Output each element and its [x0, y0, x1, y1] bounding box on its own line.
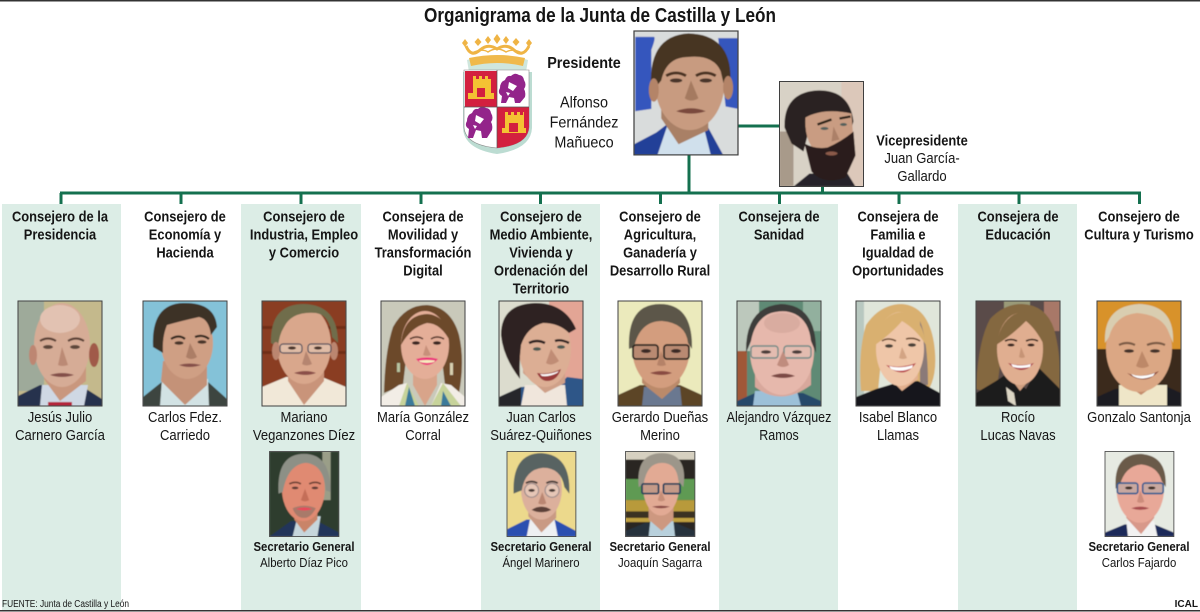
portrait: Jesús Julio Carnero García: [18, 301, 102, 406]
heading: Medio Ambiente,: [490, 227, 592, 243]
president name: Fernández: [550, 114, 618, 132]
heading: Movilidad y: [388, 227, 458, 243]
column: Consejero de Medio Ambiente, Vivienda y Ordenación del Territorio: [490, 209, 592, 570]
name: Jesús Julio: [28, 409, 93, 425]
column: Consejera de Movilidad y Transformación Digital: [375, 209, 471, 443]
portrait: Alejandro Vázquez Ramos: [737, 301, 821, 406]
secretary name: Joaquín Sagarra: [618, 555, 702, 570]
secretary name: Carlos Fajardo: [1102, 555, 1176, 570]
column: Consejero de Economía y Hacienda: [143, 209, 227, 443]
heading: Hacienda: [156, 245, 214, 261]
secretary role: Secretario General: [490, 539, 592, 554]
column: Consejero de la Presidencia: [12, 209, 108, 443]
heading: Oportunidades: [852, 263, 944, 279]
secretary role: Secretario General: [253, 539, 355, 554]
name: Suárez-Quiñones: [490, 427, 592, 443]
name: Gonzalo Santonja: [1087, 409, 1191, 425]
heading: Transformación: [375, 245, 471, 261]
column: Consejero de Agricultura, Ganadería y Desarrollo Rural: [609, 209, 711, 570]
portrait: Carlos Fdez. Carriedo: [143, 301, 227, 406]
name: Rocío: [1001, 409, 1035, 425]
title: Organigrama de la Junta de Castilla y León: [424, 5, 776, 27]
heading: Consejero de: [1098, 209, 1180, 225]
heading: Digital: [403, 263, 443, 279]
name: Ramos: [759, 427, 799, 443]
president name: Mañueco: [554, 134, 614, 152]
president role: Presidente: [547, 54, 621, 72]
column: Consejero de Cultura y Turismo: [1084, 209, 1194, 570]
panel: Educación background: [958, 204, 1077, 610]
secretary role: Secretario General: [1088, 539, 1190, 554]
portrait: Juan Carlos Suárez-Quiñones: [499, 301, 583, 406]
heading: Consejera de: [738, 209, 820, 225]
president name: Alfonso: [560, 94, 608, 112]
portrait: María González Corral: [381, 301, 465, 406]
icon: coat of arms of Castilla y León: [462, 34, 532, 154]
name: Veganzones Díez: [253, 427, 355, 443]
portrait: Alfonso Fernández Mañueco: [634, 31, 738, 155]
name: Mariano: [280, 409, 328, 425]
name: Lucas Navas: [980, 427, 1056, 443]
heading: Territorio: [513, 281, 569, 297]
credit: ICAL: ICAL: [1175, 599, 1198, 610]
heading: Vivienda y: [509, 245, 573, 261]
heading: Ganadería y: [623, 245, 697, 261]
heading: Consejero de: [619, 209, 701, 225]
source note: FUENTE: Junta de Castilla y León: [2, 599, 129, 610]
secretary name: Alberto Díaz Pico: [260, 555, 348, 570]
panel: Medio Ambiente background: [481, 204, 600, 610]
heading: Consejera de: [857, 209, 939, 225]
vice-president block: [780, 82, 968, 186]
portrait: Mariano Veganzones Díez: [262, 301, 346, 406]
portrait: Rocío Lucas Navas: [976, 301, 1060, 406]
panel: Industria background: [241, 204, 361, 610]
heading: Agricultura,: [624, 227, 696, 243]
name: Llamas: [877, 427, 919, 443]
heading: Economía y: [149, 227, 222, 243]
vice-president name: Juan García-: [884, 150, 960, 166]
heading: Consejera de: [977, 209, 1059, 225]
heading: Consejero de: [500, 209, 582, 225]
name: María González: [377, 409, 469, 425]
heading: Consejera de: [382, 209, 464, 225]
column: Consejera de Sanidad: [727, 209, 832, 443]
heading: Sanidad: [754, 227, 804, 243]
name: Merino: [640, 427, 680, 443]
name: Juan Carlos: [506, 409, 576, 425]
heading: Presidencia: [24, 227, 97, 243]
portrait: Carlos Fajardo: [1105, 452, 1174, 537]
portrait: Isabel Blanco Llamas: [856, 301, 940, 406]
heading: Industria, Empleo: [250, 227, 358, 243]
heading: Educación: [985, 227, 1051, 243]
panel: Presidencia background: [2, 204, 121, 610]
portrait: Ángel Marinero: [507, 452, 576, 537]
vice-president name: Gallardo: [897, 168, 947, 184]
name: Corral: [405, 427, 441, 443]
name: Carlos Fdez.: [148, 409, 222, 425]
name: Alejandro Vázquez: [727, 409, 832, 425]
column: Consejera de Familia e Igualdad de Oportunidades: [852, 209, 944, 443]
heading: Igualdad de: [862, 245, 934, 261]
heading: Familia e: [870, 227, 926, 243]
portrait: Gerardo Dueñas Merino: [618, 301, 702, 406]
president block: [547, 31, 738, 155]
heading: Consejero de: [144, 209, 226, 225]
portrait: Gonzalo Santonja: [1097, 301, 1181, 406]
vice-president role: Vicepresidente: [876, 133, 968, 149]
name: Carriedo: [160, 427, 210, 443]
name: Gerardo Dueñas: [612, 409, 708, 425]
heading: Consejero de: [263, 209, 345, 225]
heading: Cultura y Turismo: [1084, 227, 1194, 243]
heading: Ordenación del: [494, 263, 588, 279]
panel: Sanidad background: [719, 204, 838, 610]
portrait: Alberto Díaz Pico: [270, 452, 339, 537]
name: Carnero García: [15, 427, 105, 443]
name: Isabel Blanco: [859, 409, 937, 425]
column: Consejera de Educación: [976, 209, 1060, 443]
org chart connector lines: [60, 124, 1141, 204]
heading: Consejero de la: [12, 209, 108, 225]
portrait: Joaquín Sagarra: [626, 452, 695, 537]
secretary name: Ángel Marinero: [502, 554, 580, 570]
secretary role: Secretario General: [609, 539, 711, 554]
column: Consejero de Industria, Empleo y Comercio: [250, 209, 358, 570]
heading: y Comercio: [269, 245, 339, 261]
heading: Desarrollo Rural: [610, 263, 710, 279]
portrait: Juan García-Gallardo: [780, 82, 864, 186]
